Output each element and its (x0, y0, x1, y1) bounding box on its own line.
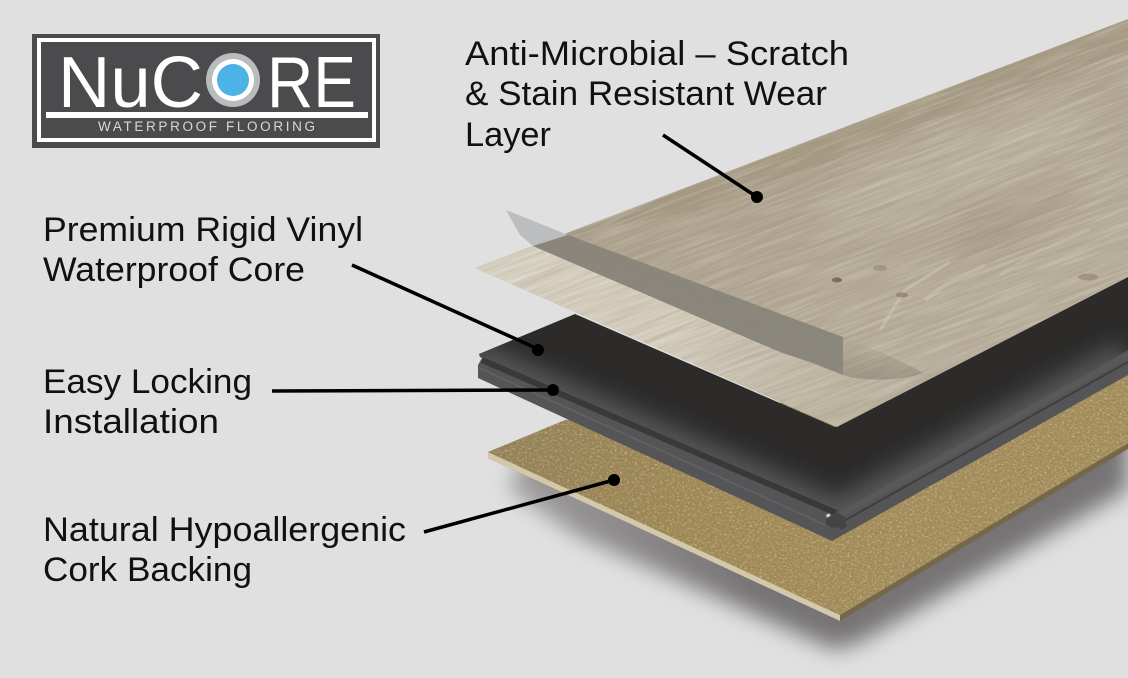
layer: rigid vinyl core (470, 277, 1128, 541)
clear film: part outside the plank (506, 210, 568, 246)
heading: core label: Waterproof Core (43, 251, 305, 289)
callout: wear layer pointer (663, 135, 763, 203)
heading: wear layer label: Layer (465, 116, 551, 154)
callout: locking pointer (272, 384, 559, 396)
logo: NuCORE: WATERPROOF FLOORING (98, 119, 315, 134)
logo: NuCORE: RE (267, 43, 356, 123)
heading: locking label: Installation (43, 403, 219, 441)
heading: cork label: Cork Backing (43, 551, 252, 589)
heading: wear layer label: & Stain Resistant Wear (465, 75, 827, 113)
heading: locking label (43, 363, 252, 441)
callout: cork pointer (424, 474, 620, 532)
logo: NuCORE: NuC (58, 43, 203, 123)
cork backing shadow (510, 380, 1128, 650)
heading: core label (43, 211, 363, 289)
clear film: band over the plank (533, 235, 843, 375)
heading: wear layer label (465, 35, 849, 154)
heading: core label: Premium Rigid Vinyl (43, 211, 363, 249)
logo: NuCORE (32, 34, 380, 148)
heading: locking label: Easy Locking (43, 363, 252, 401)
heading: cork label (43, 511, 406, 589)
heading: cork label: Natural Hypoallergenic (43, 511, 406, 549)
clear film: curled corner (843, 337, 923, 380)
layer: cork backing (488, 375, 1128, 621)
layer: wood wear layer (475, 17, 1128, 527)
callout: core pointer (352, 265, 544, 356)
heading: wear layer label: Anti-Microbial – Scratch (465, 35, 849, 73)
